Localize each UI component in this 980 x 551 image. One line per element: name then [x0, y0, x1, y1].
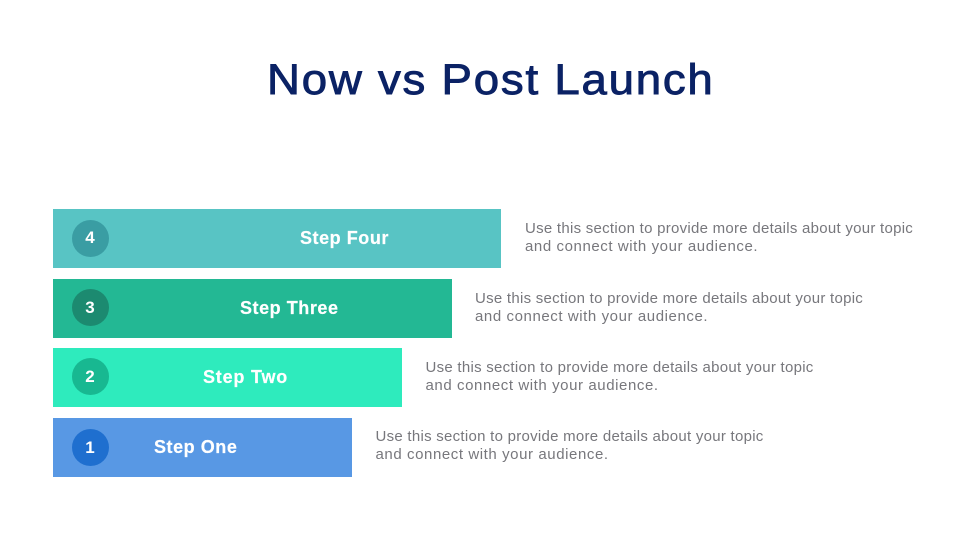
description: step one: Use this section to provide more details about your topic — [376, 428, 764, 445]
number badge 4 — [72, 220, 108, 257]
description: step four: Use this section to provide more details about your topic — [525, 220, 913, 237]
bar: step one — [53, 418, 352, 477]
number badge 3 — [72, 289, 108, 326]
description: step two: Use this section to provide more details about your topic — [426, 359, 814, 376]
description: step one — [376, 428, 764, 462]
label: step one: Step One — [154, 437, 237, 457]
number badge 3: 3 — [85, 298, 95, 317]
description: step three: Use this section to provide more details about your topic — [475, 290, 863, 307]
description: step four: and connect with your audience. — [525, 238, 758, 254]
number badge 2 — [72, 358, 108, 395]
description: step four — [525, 220, 913, 254]
number badge 4: 4 — [85, 228, 95, 247]
description: step three: and connect with your audience. — [475, 308, 708, 324]
description: step three — [475, 290, 863, 324]
description: step one: and connect with your audience. — [376, 446, 609, 462]
bar: step two — [53, 348, 402, 407]
description: step two: and connect with your audience. — [426, 376, 659, 394]
number badge 2: 2 — [85, 367, 95, 386]
description: step two — [426, 359, 814, 394]
bar: step four — [53, 209, 501, 268]
label: step two: Step Two — [203, 367, 288, 387]
label: step four: Step Four — [300, 228, 389, 248]
bar: step three — [53, 279, 452, 338]
number badge 1: 1 — [85, 438, 95, 457]
label: step three: Step Three — [240, 298, 339, 318]
number badge 1 — [72, 429, 108, 466]
title: Now vs Post Launch — [267, 56, 715, 104]
